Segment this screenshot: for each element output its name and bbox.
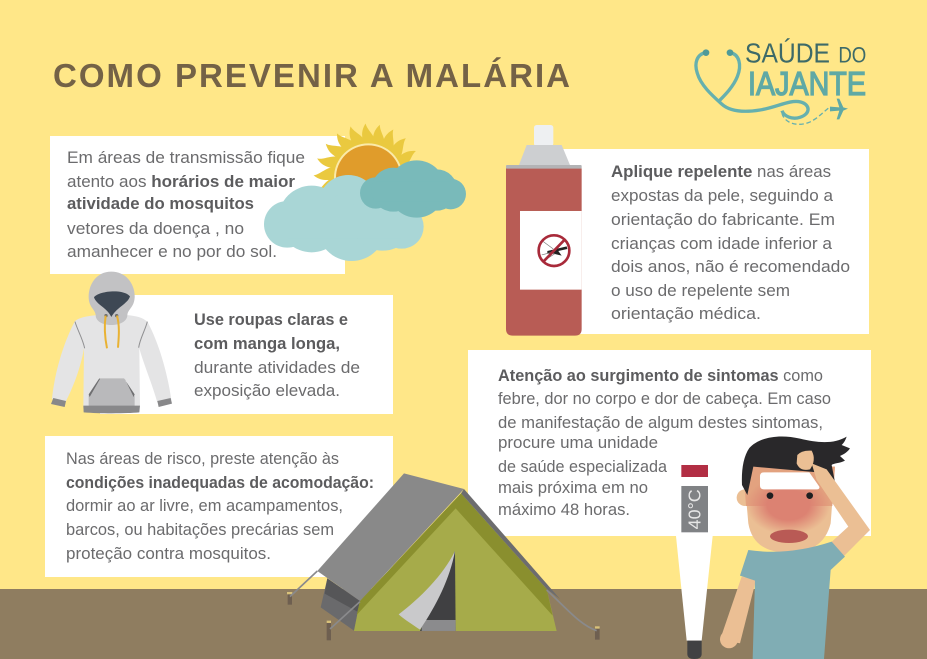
icon: tent [287,473,600,640]
title: COMO PREVENIR A MALÁRIA [53,57,570,94]
panel: symptoms: mais próxima em no [498,479,648,497]
panel: repellent: expostas da pele, seguindo a [611,187,834,205]
panel: repellent: orientação do fabricante. Em [611,211,835,229]
panel: repellent [560,149,869,334]
panel: clothing: Use roupas claras e [194,311,348,329]
panel: mosquito hours: atento aos horários de maior [67,173,296,191]
panel: clothing [100,295,393,414]
panel: symptoms: máximo 48 horas. [498,501,630,519]
panel: repellent: orientação médica. [611,305,761,323]
icon: hoodie [51,272,172,413]
panel: mosquito hours: atividade do mosquitos [67,195,254,213]
panel: symptoms [468,350,871,536]
panel: accommodation: Nas áreas de risco, preste atenção às [66,450,339,468]
logo: Saúde do Viajante: IAJANTE [748,66,866,103]
panel: clothing: com manga longa, [194,335,340,353]
panel: repellent: dois anos, não é recomendado [611,258,850,276]
panel: accommodation: condições inadequadas de acomodação: [66,474,374,492]
icon: man with fever [720,436,870,659]
panel: clothing: exposição elevada. [194,382,340,400]
logo: Saúde do Viajante: DO [838,42,866,67]
panel: accommodation: barcos, ou habitações precárias sem [66,521,334,539]
panel: repellent: Aplique repelente nas áreas [611,163,831,181]
panel: symptoms: febre, dor no corpo e dor de cabeça. Em caso [498,390,831,408]
panel: mosquito hours: amanhecer e no por do sol. [67,243,277,261]
panel: repellent: o uso de repelente sem [611,282,790,300]
panel: mosquito hours [50,136,345,274]
panel: clothing: durante atividades de [194,359,360,377]
panel: accommodation [45,436,393,577]
panel: accommodation: proteção contra mosquitos. [66,545,271,563]
icon: no mosquito [539,235,569,266]
panel: symptoms: procure uma unidade [498,434,658,452]
panel: repellent: crianças com idade inferior a [611,235,833,253]
logo: Saúde do Viajante [696,37,866,124]
panel: symptoms: de manifestação de algum destes sintomas, [498,414,823,432]
panel: mosquito hours: Em áreas de transmissão fique [67,149,305,167]
panel: symptoms: Atenção ao surgimento de sintomas como [498,367,823,385]
icon: sun and clouds [264,123,466,261]
panel: symptoms: de saúde especializada [498,458,668,476]
icon: thermometer: 40°C [685,489,705,529]
logo: Saúde do Viajante: SAÚDE [745,37,830,68]
panel: mosquito hours: vetores da doença , no [67,220,244,238]
panel: accommodation: dormir ao ar livre, em acampamentos, [66,497,343,515]
icon: thermometer [676,463,713,659]
ground [0,589,927,659]
icon: repellent spray can [506,125,582,336]
